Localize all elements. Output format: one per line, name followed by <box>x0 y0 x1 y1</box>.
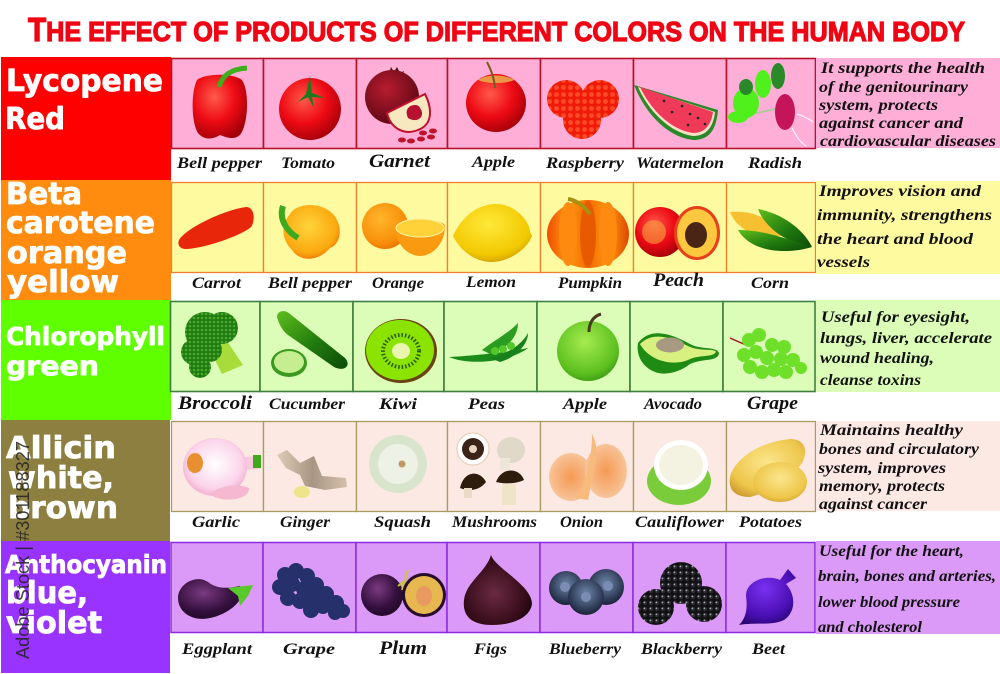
panel: anthocyanin heading <box>1 541 170 673</box>
labels: violet foods: Beet <box>751 641 786 658</box>
icon: green apple <box>557 314 619 381</box>
icon: lemon <box>453 204 532 262</box>
row: allicin white brown <box>1 420 1000 541</box>
panel: lycopene heading <box>1 57 171 180</box>
labels: orange foods: Corn <box>751 275 789 292</box>
text: brown benefits: against cancer <box>819 496 928 513</box>
labels: orange foods: Pumpkin <box>557 275 622 292</box>
labels: red foods: Apple <box>471 154 515 171</box>
icon: tomato <box>279 76 341 140</box>
text: green benefits: cleanse toxins <box>820 372 921 389</box>
icon: plum <box>361 570 446 617</box>
icon: green grapes <box>730 328 807 379</box>
labels: violet foods <box>181 638 786 659</box>
text: red benefits <box>816 58 1000 150</box>
icon: orange <box>362 203 445 256</box>
icon: figs <box>464 555 532 625</box>
icon: blueberry <box>549 569 624 615</box>
panel: beta carotene heading: carotene <box>6 206 155 241</box>
text: red benefits: cardiovascular diseases <box>820 133 996 150</box>
labels: brown foods: Cauliflower <box>635 514 725 531</box>
labels: brown foods <box>192 514 802 531</box>
panel: anthocyanin heading: violet <box>6 606 102 641</box>
panel: violet food grid <box>171 542 815 632</box>
icon: peas <box>449 323 528 362</box>
panel: lycopene heading: Lycopene <box>6 64 163 99</box>
panel: allicin heading: white, <box>8 461 114 496</box>
row: lycopene red <box>1 57 1000 180</box>
labels: green foods: Grape <box>747 393 799 414</box>
panel: beta carotene heading: Beta <box>6 177 82 212</box>
icon: carrot <box>178 207 254 249</box>
labels: orange foods: Carrot <box>192 275 242 292</box>
text: violet benefits: brain, bones and arteries, <box>818 568 996 585</box>
panel: brown food grid <box>172 422 816 512</box>
labels: green foods: Apple <box>562 396 607 413</box>
text: brown benefits: Maintains healthy <box>819 422 964 439</box>
icon: peach <box>635 206 720 260</box>
icon: onion <box>549 434 627 501</box>
icon: broccoli <box>181 312 243 378</box>
panel: lycopene heading: Red <box>5 102 65 137</box>
icon: cauliflower <box>647 440 711 505</box>
labels: brown foods: Mushrooms <box>451 514 537 531</box>
panel: beta carotene heading: yellow <box>7 265 119 300</box>
labels: orange foods: Bell pepper <box>267 275 353 292</box>
labels: brown foods: Potatoes <box>738 514 802 531</box>
icon: yellow bell pepper <box>282 205 340 259</box>
icon: cucumber <box>271 311 348 377</box>
labels: orange foods: Lemon <box>465 274 516 291</box>
panel: beta carotene heading <box>1 177 171 300</box>
labels: brown foods: Ginger <box>280 514 331 531</box>
text: green benefits <box>816 300 1000 392</box>
panel: chlorophyll heading: Chlorophyll <box>6 322 165 351</box>
labels: orange foods <box>192 270 789 292</box>
text: red benefits: system, protects <box>818 97 938 114</box>
row: beta carotene <box>1 177 1000 300</box>
text: red benefits: It supports the health <box>820 60 985 77</box>
text: violet benefits <box>816 541 1000 636</box>
icon: squash <box>369 435 427 493</box>
labels: green foods: Kiwi <box>378 396 418 413</box>
icon: blackberry <box>638 562 722 625</box>
icon: potatoes <box>730 439 807 502</box>
text: green benefits: Useful for eyesight, <box>821 309 970 326</box>
text: orange benefits: Improves vision and <box>818 183 982 200</box>
icon: ginger <box>277 450 347 498</box>
icon: pumpkin <box>547 199 629 268</box>
text: green benefits: wound healing, <box>820 350 934 367</box>
icon: garlic <box>183 438 261 500</box>
panel: allicin heading: brown <box>8 491 118 526</box>
labels: green foods <box>177 393 799 414</box>
labels: violet foods: Eggplant <box>181 641 253 658</box>
icon: watermelon <box>634 85 718 140</box>
text: violet benefits: Useful for the heart, <box>819 543 964 560</box>
labels: red foods: Tomato <box>281 155 335 172</box>
labels: brown foods: Onion <box>560 514 603 531</box>
labels: violet foods: Grape <box>283 641 335 658</box>
panel: allicin heading <box>1 420 170 541</box>
text: orange benefits: vessels <box>817 254 870 271</box>
labels: red foods: Bell pepper <box>176 155 263 172</box>
labels: orange foods: Peach <box>652 270 704 291</box>
icon: eggplant <box>178 579 253 619</box>
labels: brown foods: Squash <box>374 514 431 531</box>
icon: raspberry <box>547 80 619 139</box>
icon: beet <box>739 569 796 625</box>
text: red benefits: of the genitourinary <box>819 79 969 96</box>
text: orange benefits <box>816 181 1000 274</box>
icon: mushrooms <box>457 433 525 505</box>
labels: violet foods: Blackberry <box>640 641 723 658</box>
labels: orange foods: Orange <box>372 275 424 292</box>
labels: green foods: Broccoli <box>177 393 253 414</box>
text: orange benefits: the heart and blood <box>817 231 974 248</box>
labels: red foods <box>176 151 802 172</box>
labels: red foods: Radish <box>747 155 802 172</box>
panel: anthocyanin heading: blue, <box>6 576 88 611</box>
text: violet benefits: lower blood pressure <box>818 594 960 611</box>
panel: orange food grid <box>172 182 816 272</box>
panel: beta carotene heading: orange <box>7 236 127 271</box>
panel: red food grid <box>172 58 816 148</box>
text: violet benefits: and cholesterol <box>818 619 923 636</box>
icon: apple <box>466 62 526 132</box>
labels: red foods: Raspberry <box>545 155 625 172</box>
watermark: stock id: Adobe Stock | #301188327 <box>13 441 33 659</box>
text: brown benefits: bones and circulatory <box>819 441 980 458</box>
panel: chlorophyll heading: green <box>6 351 99 382</box>
row: anthocyanin blue violet <box>1 541 1000 673</box>
panel: chlorophyll heading <box>1 300 171 420</box>
labels: red foods: Watermelon <box>636 155 724 172</box>
icon: dark grape <box>272 563 350 620</box>
panel: green food grid <box>170 302 815 392</box>
icon: kiwi <box>365 319 437 383</box>
icon: garnet <box>365 67 437 144</box>
icon: radish <box>728 63 813 146</box>
labels: violet foods: Figs <box>473 641 507 658</box>
text: brown benefits <box>816 421 1000 513</box>
text: brown benefits: memory, protects <box>819 478 945 495</box>
text: green benefits: lungs, liver, accelerate <box>820 330 992 347</box>
panel: allicin heading: Allicin <box>6 431 116 466</box>
labels: green foods: Cucumber <box>269 396 346 413</box>
labels: red foods: Garnet <box>369 151 431 172</box>
icon: corn <box>730 209 812 251</box>
row: chlorophyll green <box>1 300 1000 420</box>
labels: violet foods: Blueberry <box>548 641 622 658</box>
text: red benefits: against cancer and <box>819 115 964 132</box>
icon: avocado <box>638 333 719 374</box>
labels: violet foods: Plum <box>378 638 427 659</box>
panel: anthocyanin heading: Anthocyanin <box>5 550 167 579</box>
labels: green foods: Avocado <box>643 396 702 413</box>
labels: green foods: Peas <box>467 396 505 413</box>
text: orange benefits: immunity, strengthens <box>817 207 992 224</box>
text: brown benefits: system, improves <box>817 460 946 477</box>
icon: bell pepper <box>193 68 247 139</box>
labels: brown foods: Garlic <box>192 514 240 531</box>
